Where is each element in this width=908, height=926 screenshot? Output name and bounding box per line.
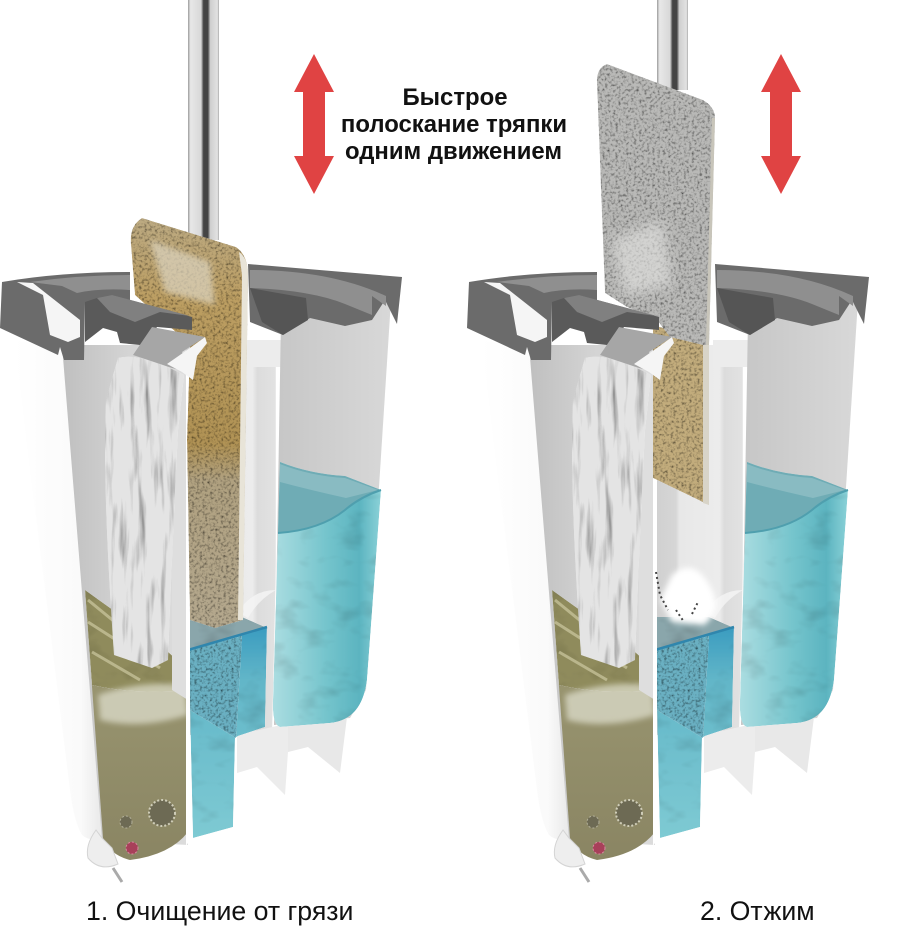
left mop pad: dirty bbox=[131, 218, 248, 628]
arrow: up and down, left bbox=[294, 54, 334, 194]
right mop pole bbox=[657, 0, 688, 90]
caption: step 1: 1. Очищение от грязи bbox=[86, 896, 353, 926]
right bucket: front rim bbox=[467, 272, 674, 380]
left mop pole bbox=[188, 0, 219, 240]
caption: step 2: 2. Отжим bbox=[700, 896, 815, 926]
left bucket: front rim bbox=[0, 272, 207, 380]
right mop pad: clean bbox=[597, 64, 715, 505]
heading: полоскание тряпки bbox=[341, 111, 567, 138]
right splash zone bbox=[656, 568, 716, 625]
heading: Быстрое bbox=[402, 84, 508, 111]
arrow: up and down, right bbox=[761, 54, 801, 194]
right bucket: body bbox=[481, 264, 869, 882]
left bucket: body bbox=[14, 264, 402, 882]
heading: одним движением bbox=[345, 138, 562, 165]
